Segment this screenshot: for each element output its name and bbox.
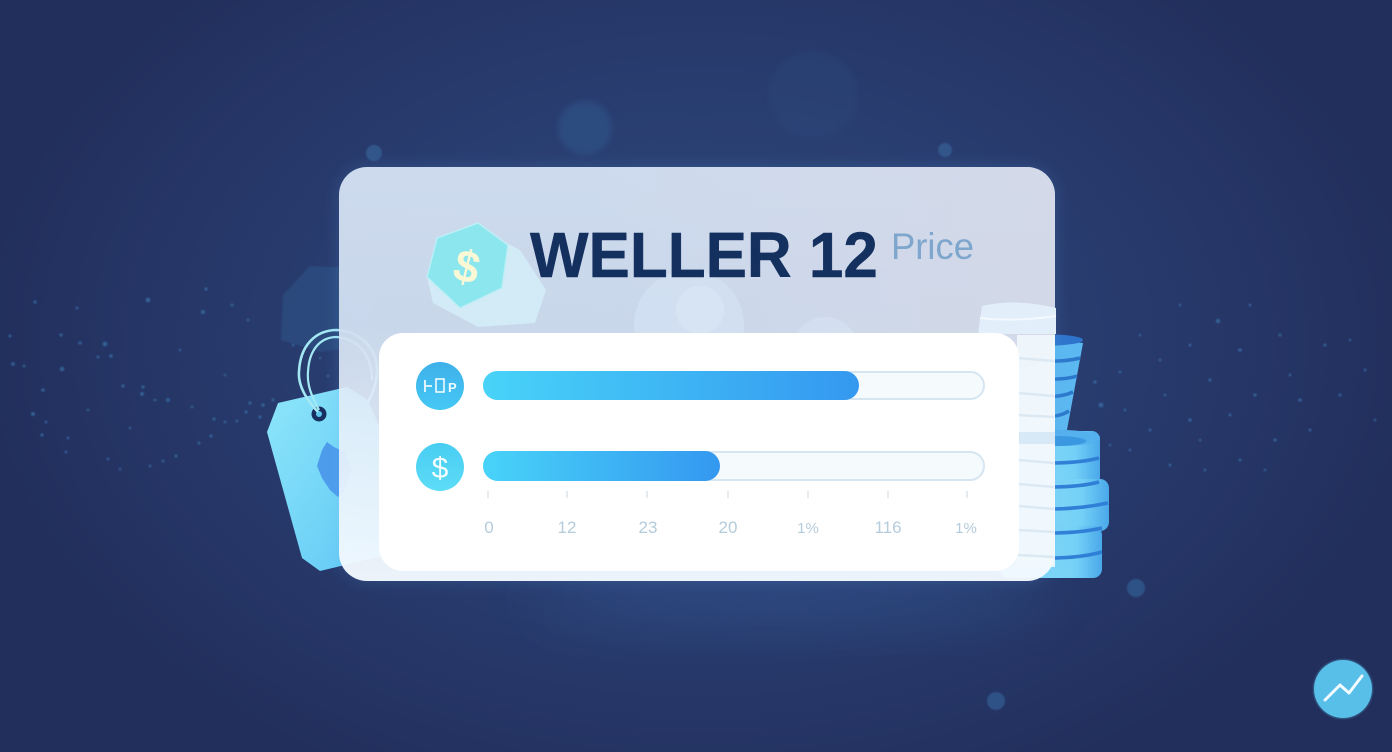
bokeh circles bbox=[366, 51, 1145, 710]
icon: dollar badge: $ bbox=[432, 452, 449, 485]
white top coin overlay bbox=[978, 302, 1056, 334]
axis labels: 0 bbox=[484, 518, 494, 537]
axis labels bbox=[484, 518, 977, 537]
axis labels: 20 bbox=[719, 518, 737, 537]
coin strip seen through card bbox=[1017, 335, 1055, 567]
bar fill bbox=[483, 451, 720, 481]
faint hexagon behind card bbox=[281, 266, 372, 352]
bar row 1 bbox=[416, 362, 984, 410]
price tag bbox=[267, 330, 395, 571]
icon: dollar hexagon: $ bbox=[449, 239, 485, 294]
subtitle: Price bbox=[891, 226, 974, 267]
icon: HP badge: P bbox=[448, 380, 457, 395]
particle wave right bbox=[1093, 304, 1376, 471]
axis labels: 23 bbox=[639, 518, 657, 537]
card soft circles bbox=[634, 270, 858, 383]
bar row 2 bbox=[416, 443, 984, 491]
icon: dollar hexagon bbox=[427, 223, 508, 308]
axis ticks bbox=[488, 491, 967, 498]
bar track bbox=[484, 372, 984, 399]
icon: dollar badge bbox=[416, 443, 464, 491]
axis labels: 1% bbox=[797, 520, 819, 537]
axis labels: 1% bbox=[955, 520, 977, 537]
icon: trend badge bbox=[1313, 659, 1373, 719]
glass card bbox=[339, 167, 1056, 581]
coin stacks bbox=[1000, 334, 1109, 578]
glow under card bbox=[530, 567, 1050, 623]
icon: HP badge bbox=[416, 362, 464, 410]
axis labels: 12 bbox=[558, 518, 576, 537]
lighter hexagon bbox=[427, 228, 546, 327]
particle wave left bbox=[8, 287, 329, 470]
bar fill bbox=[483, 371, 859, 400]
title: WELLER 12 bbox=[530, 220, 878, 291]
axis labels: 116 bbox=[874, 518, 902, 537]
bar track bbox=[484, 452, 984, 480]
panel: data panel bbox=[379, 333, 1019, 571]
